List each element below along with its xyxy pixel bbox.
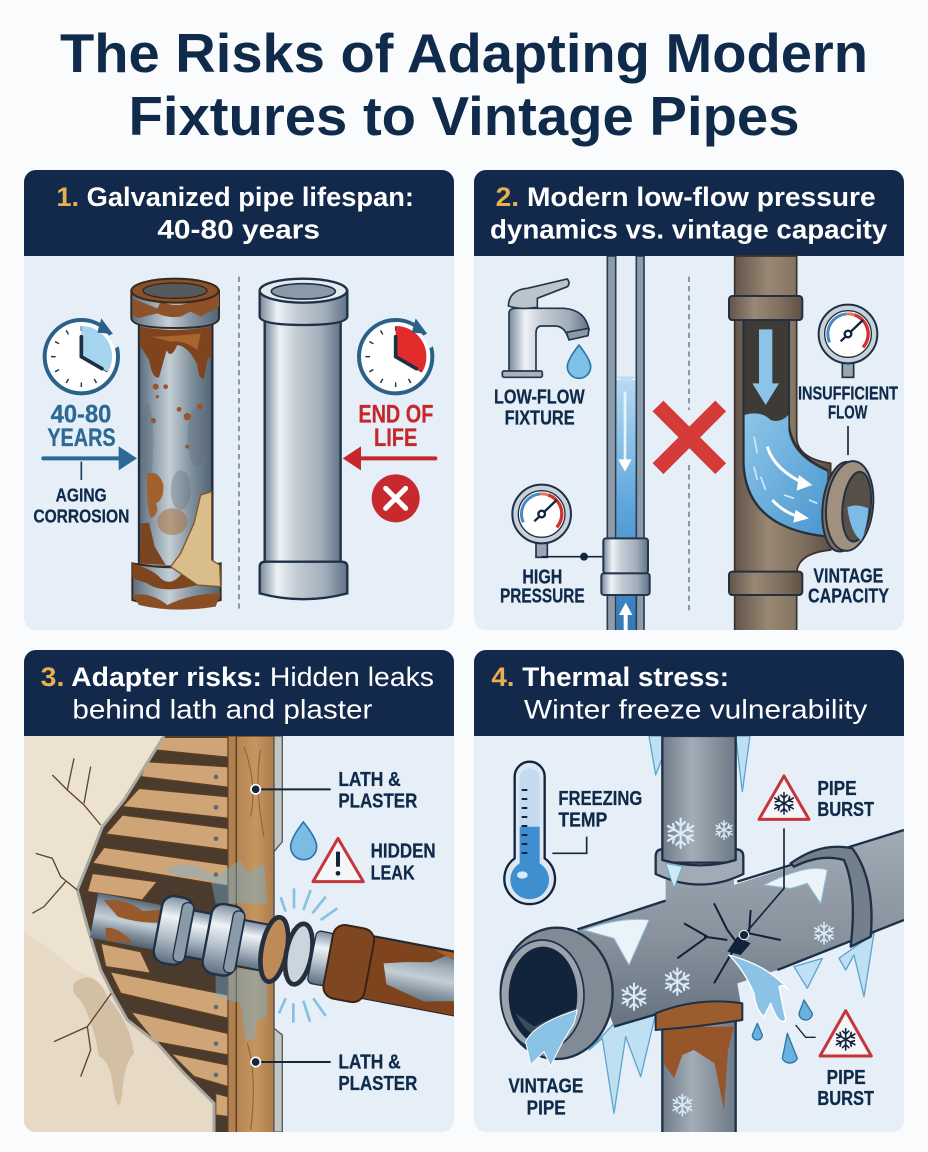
text: pipe burst top: BURST: [817, 799, 874, 821]
text: pipe burst bottom: BURST: [817, 1088, 874, 1110]
text: vintage capacity: [808, 568, 889, 603]
icon: high pressure gauge: [512, 485, 602, 561]
panel 1 heading: 1. Galvanized pipe lifespan:: [56, 182, 414, 212]
callout leader: crack: [739, 828, 784, 940]
wall cutaway with lath and plaster: [24, 736, 282, 1133]
text: pipe burst bottom: PIPE: [827, 1067, 866, 1089]
text: high pressure: [500, 569, 584, 603]
text: hidden leak: LEAK: [371, 862, 415, 884]
text: aging corrosion: [34, 488, 128, 523]
arrow: end of life: [346, 450, 435, 467]
panel: low-flow pressure dynamics: [474, 170, 904, 633]
text: freezing temp: TEMP: [558, 810, 607, 832]
text: low-flow fixture: LOW-FLOW: [494, 386, 585, 408]
panel 3 heading: [24, 650, 454, 736]
text: insufficient flow: INSUFFICIENT: [798, 382, 898, 403]
callout: lath and plaster bottom: [250, 1054, 418, 1090]
text: pipe burst top: PIPE: [817, 778, 857, 800]
icon: warning triangle: [313, 838, 363, 882]
icon: burst warning bottom: [796, 1011, 871, 1056]
text: vintage pipe: PIPE: [527, 1097, 566, 1119]
text: end of life: END OF: [358, 402, 433, 429]
rusted galvanized pipe: [131, 279, 221, 610]
icon: low-flow faucet: [502, 279, 591, 378]
panel 2 heading: [474, 170, 904, 256]
text: 40-80 years: [48, 404, 115, 446]
panel 3 heading: behind lath and plaster: [72, 694, 372, 724]
title: Fixtures to Vintage Pipes: [128, 85, 800, 147]
icon: red cross: [658, 406, 721, 469]
panel 2 heading: dynamics vs. vintage capacity: [490, 214, 888, 244]
callout: lath and plaster top: [250, 772, 418, 808]
text: vintage pipe: [508, 1076, 583, 1119]
text: pipe burst top: [817, 778, 874, 821]
wall cracks: [32, 758, 111, 1077]
text: hidden leak: [372, 843, 435, 880]
water spray lines: [279, 888, 337, 1023]
text: aging corrosion: CORROSION: [33, 505, 129, 526]
panel 3 heading: 3. Adapter risks: Hidden leaks: [41, 662, 434, 692]
callout: lath and plaster top: PLASTER: [338, 790, 418, 812]
callout: lath and plaster bottom: PLASTER: [338, 1073, 418, 1095]
frozen pipe assembly: [501, 736, 904, 1133]
callout: lath and plaster bottom: LATH &: [338, 1051, 401, 1073]
icon: thermometer: [504, 762, 555, 904]
text: hidden leak: HIDDEN: [371, 840, 436, 862]
icon: water drop: [291, 822, 317, 860]
icon: aging clock: [45, 318, 118, 393]
title: The Risks of Adapting Modern: [60, 22, 868, 84]
vintage elbow pipe: [729, 256, 878, 633]
text: vintage pipe: VINTAGE: [508, 1076, 583, 1098]
text: pipe burst bottom: [817, 1067, 874, 1110]
panel 4 heading: [474, 650, 904, 736]
panel 4 heading: 4. Thermal stress:: [491, 662, 729, 692]
text: 40-80 years: YEARS: [47, 425, 116, 452]
panel 2 heading: 2. Modern low-flow pressure: [496, 182, 876, 212]
arrow: aging: [43, 450, 133, 467]
panel: thermal stress: [474, 650, 904, 1133]
text: freezing temp: [552, 788, 642, 853]
text: vintage capacity: VINTAGE: [813, 566, 883, 588]
text: high pressure: HIGH: [522, 566, 562, 588]
text: freezing temp: FREEZING: [558, 788, 642, 810]
panel 4 heading: Winter freeze vulnerability: [524, 694, 868, 724]
text: 40-80 years: 40-80: [51, 402, 111, 429]
title: [60, 22, 868, 147]
panel: adapter risks: [24, 650, 494, 1133]
text: insufficient flow: [798, 386, 898, 419]
modern narrow pipe: [601, 256, 650, 633]
icon: end of life clock: [359, 318, 432, 393]
text: end of life: [360, 404, 433, 446]
text: end of life: LIFE: [374, 425, 417, 452]
text: vintage capacity: CAPACITY: [808, 586, 889, 608]
text: aging corrosion: AGING: [56, 485, 107, 506]
callout: lath and plaster top: LATH &: [338, 769, 401, 791]
icon: insufficient flow gauge: [819, 305, 877, 377]
panel: galvanized pipe lifespan: [24, 170, 454, 630]
pipe with adapter fittings: [90, 893, 454, 1016]
icon: burst warning top: [759, 776, 809, 819]
panel 1 heading: 40-80 years: [157, 214, 320, 244]
text: high pressure: PRESSURE: [500, 586, 585, 608]
text: low-flow fixture: FIXTURE: [505, 407, 575, 429]
text: insufficient flow: FLOW: [828, 401, 868, 422]
text: low-flow fixture: [494, 389, 585, 425]
icon: red x badge: [372, 474, 420, 522]
new steel pipe: [260, 279, 347, 599]
panel 1 heading: [24, 170, 454, 256]
